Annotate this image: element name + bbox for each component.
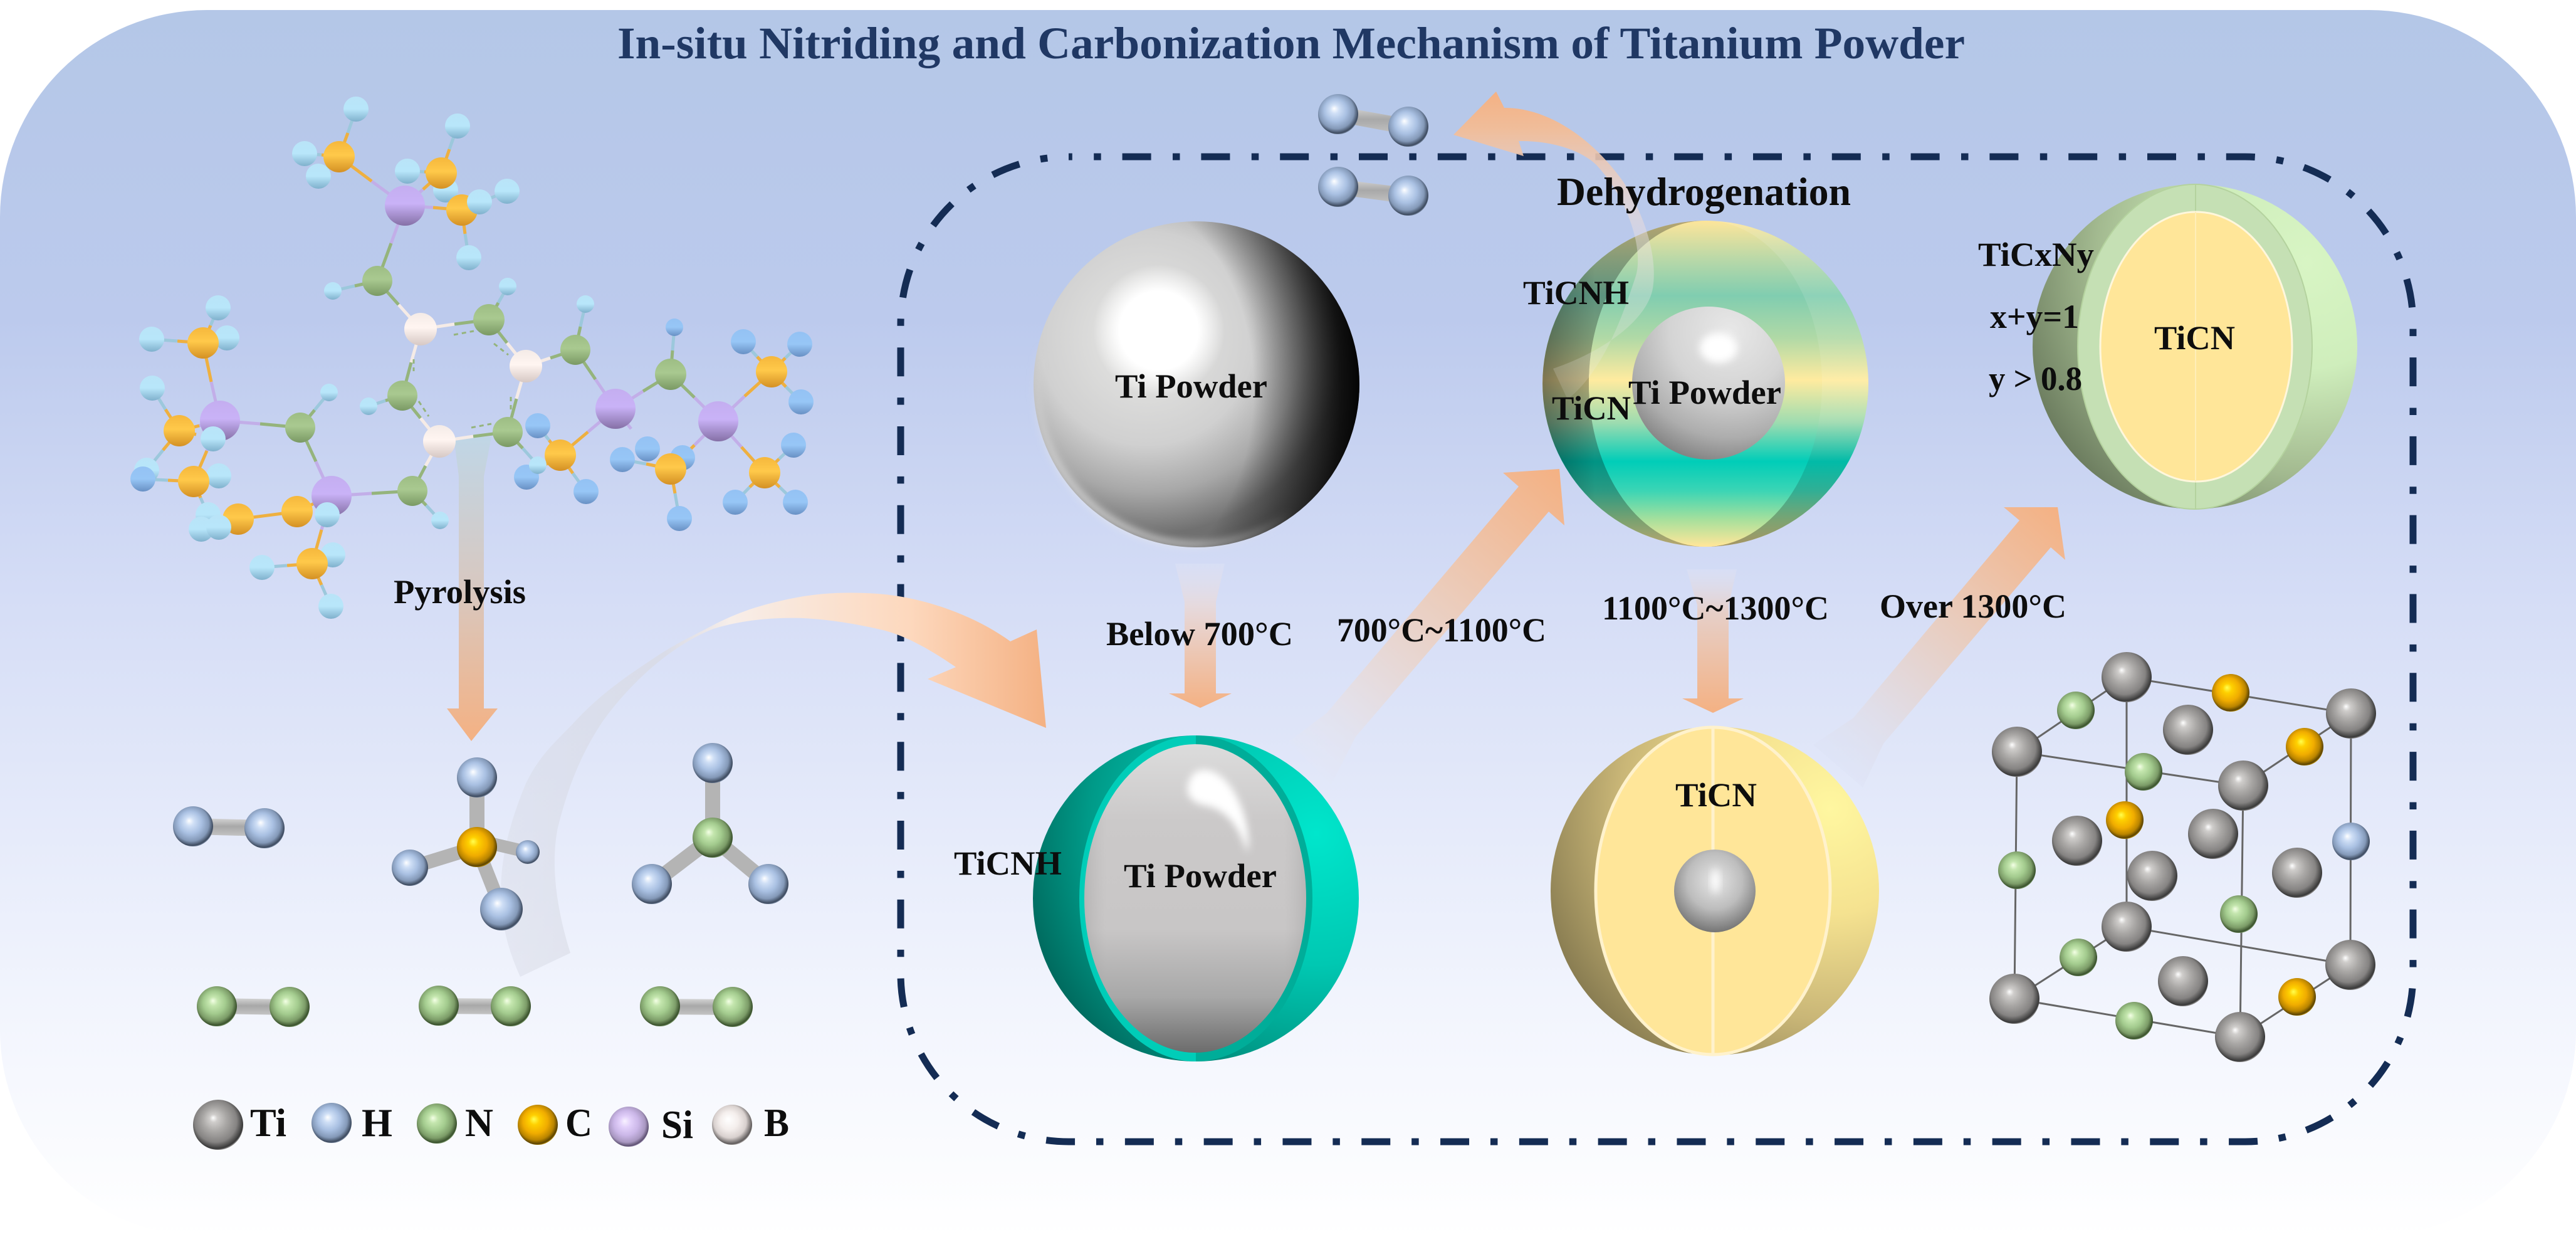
label: y > 0.8: y > 0.8 [1989, 360, 2082, 397]
label: Ti Powder: Ti Powder [1124, 857, 1277, 895]
gas molecule: NH3 [632, 743, 788, 904]
legend: atom key: N [465, 1100, 493, 1145]
label: x+y=1: x+y=1 [1990, 298, 2079, 335]
label: Below 700C: Below 700°C [1106, 615, 1293, 653]
label: Ti Powder: Ti Powder [1115, 367, 1267, 405]
gas molecule: released H2 upper [1318, 94, 1428, 147]
legend: atom key: Si [661, 1102, 693, 1147]
label: 700C to 1100C: 700°C~1100°C [1337, 611, 1546, 649]
sphere: Ti powder with TiCNH shell [1033, 735, 1359, 1061]
label: Ti Powder: Ti Powder [1628, 374, 1781, 411]
sphere: TiCxNy shell on TiCN core [2033, 184, 2357, 509]
arrow: curved arrow from gases to particle [501, 592, 1046, 977]
legend: atom key: H [362, 1100, 392, 1145]
legend: atom key: C [565, 1100, 592, 1145]
label: 1100C to 1300C: 1100°C~1300°C [1602, 589, 1829, 627]
molecule: precursor [130, 97, 814, 619]
molecule bonds [143, 109, 801, 606]
label: TiCN: TiCN [1552, 389, 1631, 427]
label: Pyrolysis: Pyrolysis [394, 573, 526, 611]
gas molecule: CH4 [392, 757, 540, 930]
label: TiCN: TiCN [1675, 776, 1757, 814]
gas molecule: N2 left [197, 986, 310, 1027]
arrow: 700-1100C [1289, 469, 1564, 784]
arrow: below 700C [1169, 564, 1232, 708]
gas molecule: N2 centre [419, 986, 531, 1026]
arrow: pyrolysis [447, 437, 498, 741]
crystal lattice: TiCN unit cell [1989, 652, 2376, 1062]
dash-dot reaction frame [901, 157, 2413, 1142]
label: Over 1300C: Over 1300°C [1880, 587, 2066, 625]
sphere: graded TiCNH / TiCN [1542, 221, 1868, 547]
legend: atom key: B [764, 1100, 789, 1145]
title: In-situ Nitriding and Carbonization Mechanism of Titanium Powder [617, 18, 1965, 68]
gas molecule: released H2 lower [1318, 167, 1428, 216]
arrow: 1100-1300C [1682, 569, 1744, 713]
sphere: TiCN with residual Ti core [1551, 727, 1879, 1055]
label: TiCNH shell: TiCNH [954, 845, 1062, 882]
arrow: dehydrogenation release [1453, 92, 1654, 399]
molecule atoms [130, 97, 814, 619]
label: Dehydrogenation: Dehydrogenation [1557, 169, 1851, 214]
arrow: over 1300C [1813, 507, 2065, 787]
label: TiCN: TiCN [2154, 319, 2235, 357]
gas molecule: N2 right [640, 986, 753, 1027]
legend: atom key: Ti [250, 1100, 286, 1145]
gas molecule: H2 [173, 806, 285, 848]
label: TiCNH: TiCNH [1523, 274, 1629, 312]
label: TiCxNy: TiCxNy [1978, 236, 2094, 273]
sphere: Ti powder [1034, 221, 1359, 547]
legend: atom key [193, 1100, 789, 1150]
